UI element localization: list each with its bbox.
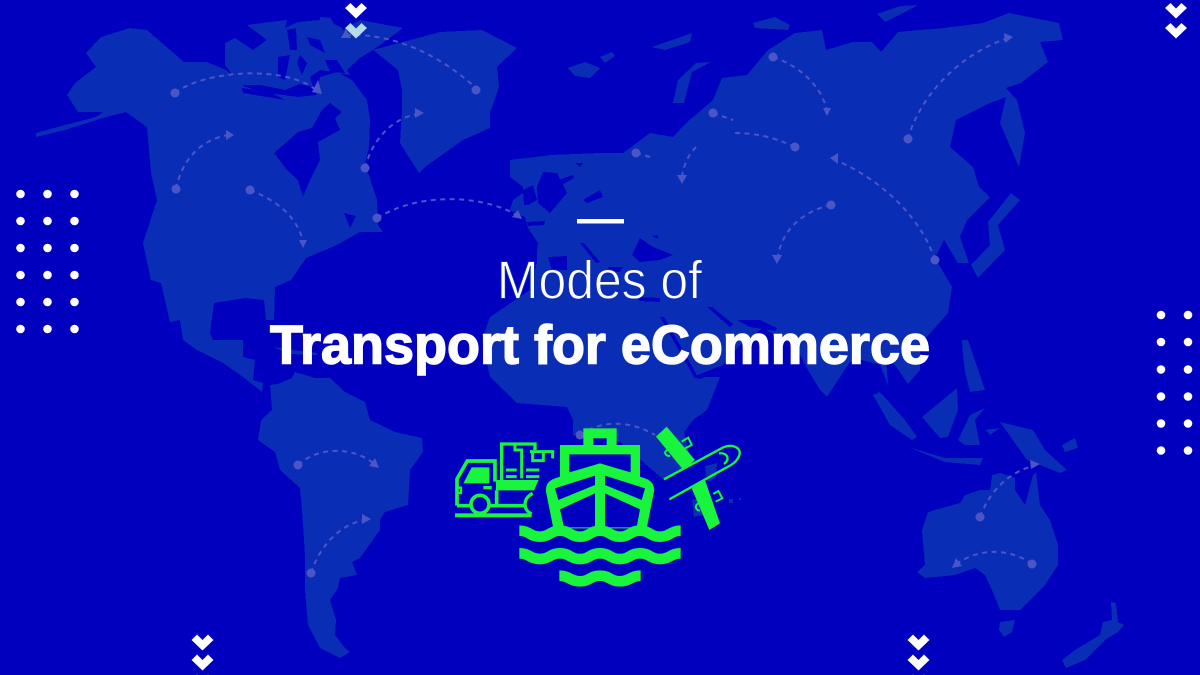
madagascar [692, 463, 741, 517]
island: New Zealand [1062, 602, 1124, 668]
title: line one: Modes of [497, 250, 703, 310]
continent: North America [36, 17, 403, 392]
icon: delivery truck [455, 444, 553, 517]
islands: South East Asia and Oceania [873, 340, 1078, 473]
Arctic channels and Hudson Bay water [242, 16, 356, 228]
chevrons: top centre [345, 3, 367, 38]
continent: Greenland [373, 30, 517, 173]
title: line two: Transport for eCommerce [270, 314, 930, 376]
chevrons: bottom left [192, 634, 214, 675]
inland seas [523, 163, 777, 379]
icon group: transport modes [455, 427, 740, 581]
dot grid: left [16, 190, 79, 333]
chevrons: top right [1165, 3, 1187, 38]
chevrons: bottom right [908, 634, 930, 675]
icon: airplane [656, 427, 740, 530]
continent: Eurasia [510, 13, 1063, 397]
continent: Australia [917, 472, 1058, 610]
icon: ship [519, 428, 681, 581]
route arrows [170, 29, 1040, 578]
title accent bar [577, 219, 624, 224]
dot grid: right [1157, 311, 1192, 455]
continent: Africa [482, 262, 720, 480]
island: Tasmania [999, 620, 1015, 637]
islands: Arctic and Japan [568, 5, 1020, 278]
continent: South America [258, 372, 423, 658]
